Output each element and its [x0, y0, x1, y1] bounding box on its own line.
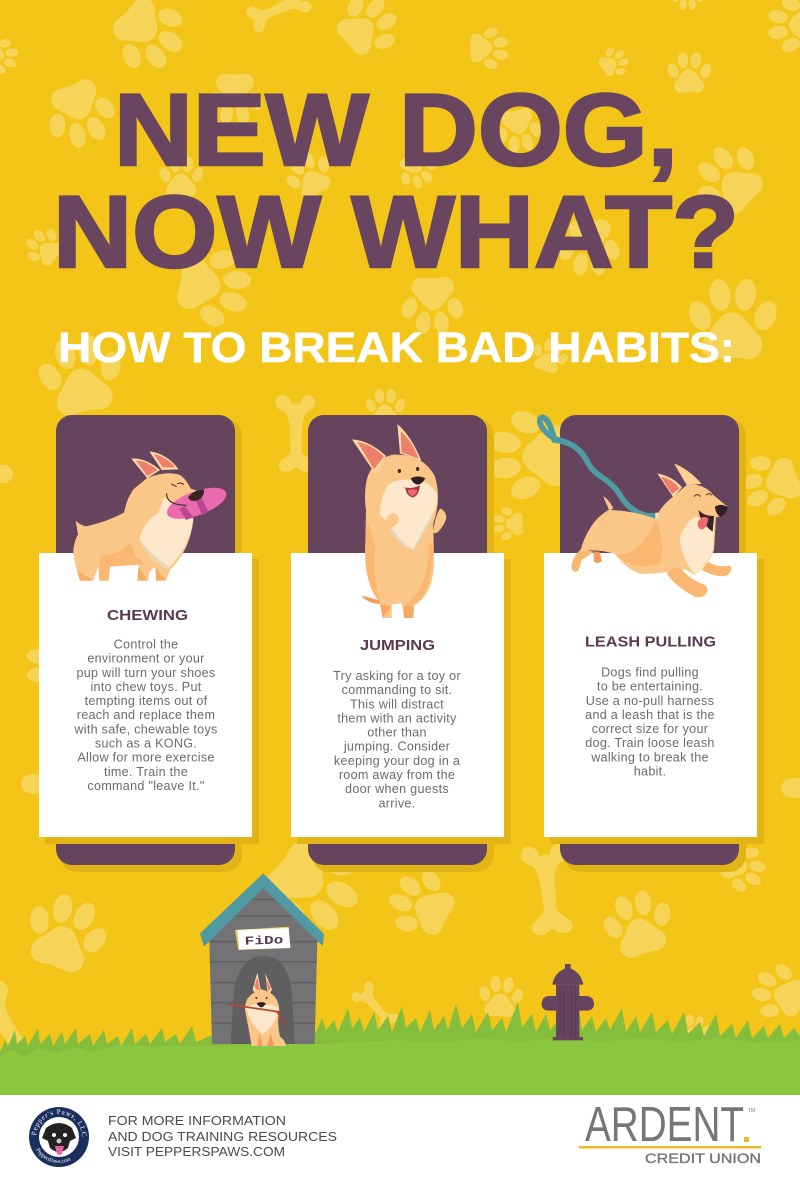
title	[53, 73, 739, 289]
text: jumping advice: arrive.	[379, 796, 415, 810]
text: chewing advice: command "leave It."	[87, 779, 205, 793]
footer band	[0, 1095, 800, 1178]
text: jumping advice: door when guests	[345, 782, 449, 796]
text: jumping advice: them with an activity	[337, 711, 457, 725]
logo: Pepper's Paws: PeppersPaws.com	[36, 1148, 71, 1163]
text: leash pulling advice: Use a no-pull harness	[586, 694, 714, 708]
name sign	[235, 927, 290, 950]
text: chewing advice	[73, 638, 218, 793]
panel: chewing	[39, 415, 259, 872]
dog: jumping up	[352, 424, 446, 618]
text: jumping advice: room away from the	[339, 768, 455, 782]
title: NEW DOG,	[114, 73, 678, 187]
fire hydrant	[542, 964, 594, 1040]
text: chewing advice: time. Train the	[104, 765, 188, 779]
footer contact text: VISIT PEPPERSPAWS.COM	[108, 1144, 285, 1159]
dog: chewing with frisbee	[73, 451, 230, 581]
text: jumping advice	[333, 669, 461, 810]
dog house	[200, 873, 324, 1046]
text: leash pulling advice: correct size for your	[592, 722, 708, 736]
text: jumping advice: keeping your dog in a	[334, 754, 460, 768]
panel: jumping	[291, 415, 511, 872]
logo: Ardent Credit Union	[579, 1098, 761, 1166]
text: chewing advice: into chew toys. Put	[90, 680, 202, 694]
text: leash pulling advice: walking to break the	[590, 750, 709, 764]
dog in doorway	[228, 973, 287, 1046]
logo: Ardent Credit Union: ARDENT	[585, 1098, 744, 1152]
text: leash pulling advice: and a leash that is the	[585, 708, 715, 722]
footer contact text: AND DOG TRAINING RESOURCES	[108, 1129, 337, 1144]
logo: Ardent Credit Union: TM	[748, 1108, 755, 1114]
text: jumping advice: other than	[367, 726, 427, 740]
heading: jumping: JUMPING	[360, 637, 435, 654]
logo: Pepper's Paws	[29, 1107, 89, 1167]
text: jumping advice: Try asking for a toy or	[333, 669, 461, 683]
text: chewing advice: pup will turn your shoes	[76, 666, 216, 680]
roof	[200, 873, 324, 947]
text: leash pulling advice: dog. Train loose leash	[585, 736, 715, 750]
subtitle: HOW TO BREAK BAD HABITS:	[58, 324, 735, 372]
text: chewing advice: such as a KONG.	[95, 736, 197, 750]
text: leash pulling advice	[585, 666, 715, 778]
text: chewing advice: with safe, chewable toys	[73, 722, 218, 736]
footer contact text	[108, 1113, 337, 1159]
text: chewing advice: Allow for more exercise	[77, 751, 215, 765]
title: NOW WHAT?	[53, 175, 739, 289]
grass	[0, 1002, 800, 1095]
leash	[540, 417, 655, 516]
panel: leash pulling	[544, 415, 764, 872]
text: leash pulling advice: habit.	[634, 764, 666, 778]
text: jumping advice: This will distract	[350, 697, 444, 711]
logo: Pepper's Paws: Pepper's Paws, LLC	[32, 1109, 87, 1136]
text: jumping advice: jumping. Consider	[343, 740, 450, 754]
logo: Ardent Credit Union: CREDIT UNION	[645, 1150, 761, 1166]
text: leash pulling advice: Dogs find pulling	[601, 666, 699, 680]
dog: pulling on leash	[540, 417, 731, 597]
text: chewing advice: reach and replace them	[77, 708, 215, 722]
doorway	[231, 956, 295, 1044]
text: chewing advice: environment or your	[87, 652, 205, 666]
footer contact text: FOR MORE INFORMATION	[108, 1113, 286, 1128]
text: jumping advice: commanding to sit.	[342, 683, 452, 697]
text: chewing advice: tempting items out of	[85, 694, 208, 708]
heading: leash pulling: LEASH PULLING	[585, 634, 716, 650]
text: leash pulling advice: to be entertaining.	[597, 680, 703, 694]
text: chewing advice: Control the	[114, 638, 178, 652]
name sign: FiDo	[244, 933, 284, 949]
heading: chewing: CHEWING	[107, 607, 188, 624]
